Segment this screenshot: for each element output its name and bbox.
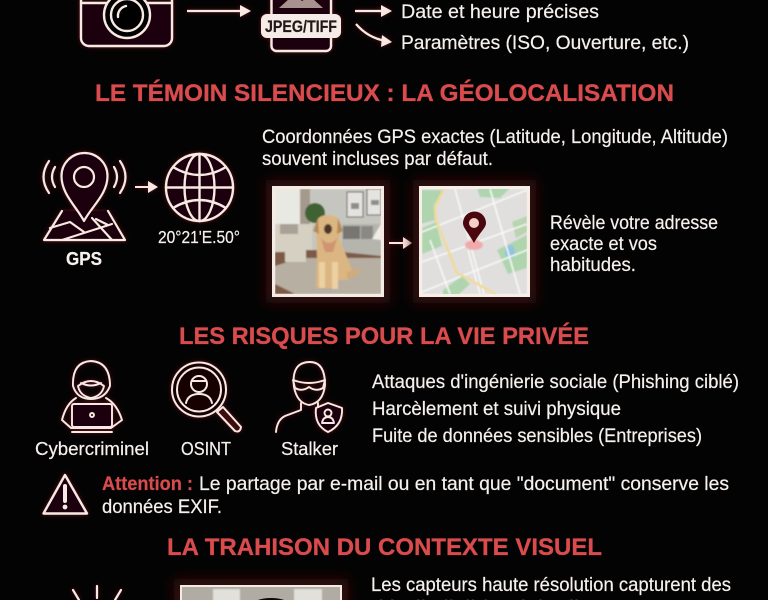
photo: room with window bbox=[174, 579, 348, 600]
label: OSINT: OSINT bbox=[181, 438, 231, 459]
map with location pin bbox=[413, 180, 536, 303]
icon: camera bbox=[81, 0, 172, 46]
arrow: camera to file bbox=[187, 5, 251, 17]
icon: GPS pin on map bbox=[43, 153, 126, 240]
callout: attention: Attention : bbox=[102, 474, 193, 495]
icon: globe bbox=[166, 154, 233, 221]
label: cybercriminal: Cybercriminel bbox=[35, 438, 149, 459]
icon: OSINT magnifier bbox=[172, 362, 241, 432]
list: privacy risks: Attaques d'ingénierie sociale (Phishing ciblé) bbox=[372, 371, 739, 393]
text: parameters: Paramètres (ISO, Ouverture, etc.) bbox=[401, 32, 689, 54]
text: GPS description: souvent incluses par défaut. bbox=[262, 148, 493, 170]
icon: light rays bbox=[73, 586, 121, 600]
icon: JPEG/TIFF file: JPEG/TIFF bbox=[265, 18, 337, 36]
callout: attention bbox=[102, 473, 729, 518]
label: coordinates: 20°21'E.50° bbox=[158, 227, 240, 247]
photo: dog in living room bbox=[266, 180, 390, 303]
callout: attention: données EXIF. bbox=[102, 496, 222, 518]
arrow: photo to map bbox=[389, 237, 412, 249]
text: reveals address bbox=[550, 212, 718, 276]
label: stalker: Stalker bbox=[281, 438, 338, 459]
text: GPS description: Coordonnées GPS exactes (Latitude, Longitude, Altitude) bbox=[262, 126, 728, 148]
list: privacy risks: Fuite de données sensibles (Entreprises) bbox=[372, 425, 702, 447]
arrow: parameters bbox=[356, 24, 392, 47]
text: GPS description bbox=[262, 126, 728, 170]
list: privacy risks: Harcèlement et suivi physique bbox=[372, 398, 621, 420]
callout: attention: Le partage par e-mail ou en tant que "document" conserve les bbox=[199, 473, 729, 495]
heading: geolocation: LE TÉMOIN SILENCIEUX : LA GÉOLOCALISATION bbox=[95, 79, 674, 107]
heading: visual context: LA TRAHISON DU CONTEXTE VISUEL bbox=[167, 534, 602, 561]
text: reveals address: exacte et vos bbox=[550, 233, 657, 255]
icon: JPEG/TIFF file bbox=[261, 0, 341, 51]
icon: warning triangle bbox=[44, 475, 87, 514]
text: reveals address: Révèle votre adresse bbox=[550, 212, 718, 234]
arrow: GPS to globe bbox=[135, 181, 158, 193]
text: date: Date et heure précises bbox=[401, 1, 599, 23]
icon: stalker with shield bbox=[276, 362, 342, 432]
heading: privacy risks: LES RISQUES POUR LA VIE PRIVÉE bbox=[179, 322, 589, 350]
text: reveals address: habitudes. bbox=[550, 254, 636, 276]
text: high resolution sensors: Les capteurs haute résolution capturent des bbox=[371, 574, 731, 596]
icon: hooded cybercriminal bbox=[62, 361, 122, 432]
arrow: date bbox=[355, 5, 392, 17]
label: GPS: GPS bbox=[66, 249, 102, 269]
list: privacy risks bbox=[372, 371, 739, 447]
